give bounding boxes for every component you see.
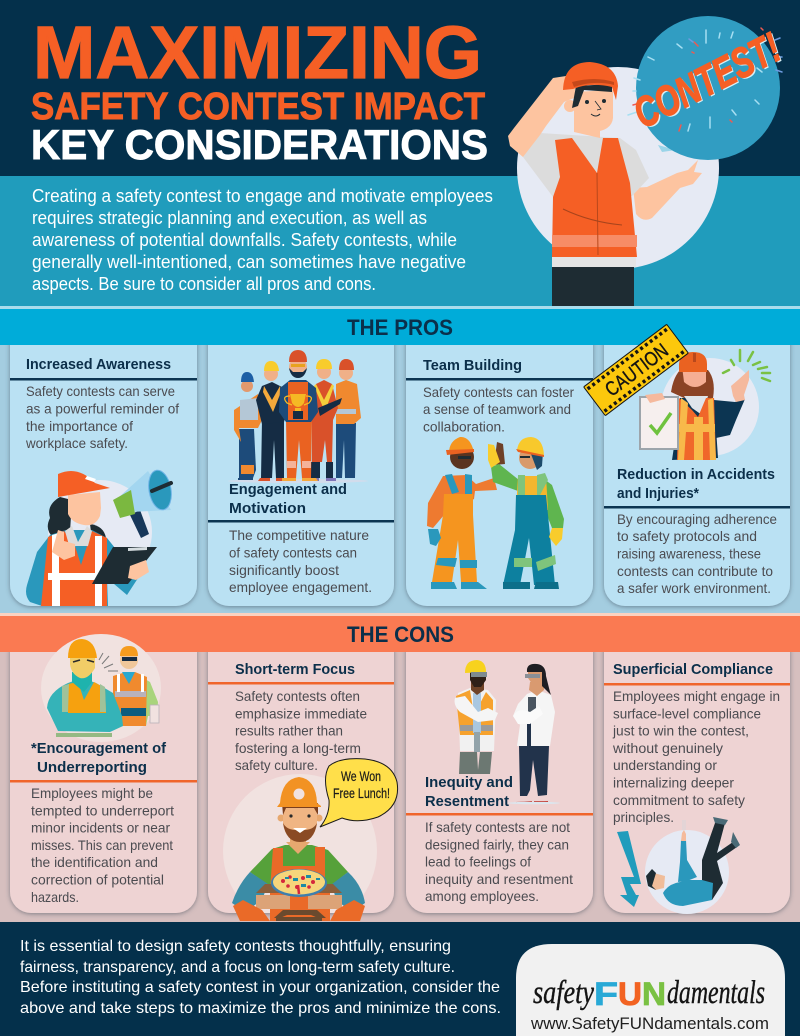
illustration: woman with checklist: [640, 350, 770, 460]
logo panel: www.SafetyFUNdamentals.com: [530, 1014, 769, 1033]
intro text: generally well-intentioned, can sometimes have negative: [32, 252, 466, 272]
panel: engagement and motivation: Engagement and: [229, 481, 347, 498]
panel text: inequity and resentment: lead to feelings of: [425, 854, 531, 870]
illustration: falling man and lightning bolt: [617, 817, 740, 914]
logo wordmark: F: [594, 976, 618, 1012]
worker 1: [234, 372, 262, 480]
pros band: [0, 309, 800, 345]
panel: increased awareness: [10, 320, 197, 606]
header background: [0, 0, 800, 176]
panel: team building: a sense of teamwork and: [423, 401, 571, 417]
panel: reduction in accidents: Reduction in Accidents: [617, 466, 775, 483]
title: MAXIMIZING: [33, 11, 482, 94]
panel text: superficial compliance: commitment to safety: [613, 792, 745, 808]
illustration: man and woman with crossed arms: [455, 660, 560, 804]
intro background band: [0, 176, 800, 306]
illustration: woman with megaphone: [26, 468, 174, 606]
title: KEY CONSIDERATIONS: [31, 121, 488, 168]
panel text: inequity and resentment: designed fairly, they can: [425, 836, 569, 852]
panel text: inequity and resentment: among employees.: [425, 888, 539, 904]
panel text: short-term focus: fostering a long-term: [235, 740, 361, 756]
footer background: [0, 922, 800, 1036]
icon: caution sign: [584, 324, 688, 416]
logo wordmark: [533, 975, 765, 1012]
panel text: inequity and resentment: inequity and resentment: [425, 871, 573, 887]
panel: engagement and motivation: The competitive nature: [229, 527, 369, 543]
cons band: [0, 616, 800, 652]
logo wordmark: safety: [533, 975, 594, 1011]
panel text: superficial compliance: [604, 661, 790, 825]
panel: engagement and motivation: [208, 320, 394, 606]
divider line: [0, 306, 800, 309]
panel: reduction in accidents: and Injuries*: [617, 485, 699, 502]
footer text: fairness, transparency, and a focus on long-term safety culture.: [20, 959, 455, 976]
panel text: superficial compliance: Employees might engage in: [613, 688, 780, 704]
logo panel: [516, 944, 785, 1036]
man in vest: [455, 660, 498, 774]
worker 5: [336, 359, 361, 478]
illustration: team with trophy: [228, 350, 368, 483]
footer text: Before instituting a safety contest in your organization, consider the: [20, 979, 500, 996]
panel text: inequity and resentment: [406, 774, 593, 904]
panel: engagement and motivation: Motivation: [229, 500, 306, 517]
cons section background: [0, 652, 800, 923]
callout: we won free lunch: We Won: [341, 768, 381, 784]
panel text: inequity and resentment: If safety contests are not: [425, 819, 570, 835]
panel text: superficial compliance: just to win the contest,: [612, 723, 749, 739]
panel text: encouragement of underreporting: correction of potential: [31, 872, 164, 888]
callout: we won free lunch: [320, 759, 398, 827]
illustration: contest speech bubble: [626, 16, 790, 160]
panel text: encouragement of underreporting: [10, 740, 197, 905]
illustration: two workers high five: [427, 437, 564, 589]
panel text: superficial compliance: surface-level compliance: [613, 705, 761, 721]
panel text: encouragement of underreporting: misses. This can prevent: [31, 837, 173, 853]
divider line: [0, 613, 800, 616]
panel: team building: collaboration.: [423, 418, 505, 434]
panel: reduction in accidents: a safer work environment.: [617, 580, 771, 596]
panel: increased awareness: the importance of: [26, 418, 133, 434]
panel: reduction in accidents: By encouraging adherence: [617, 511, 777, 527]
panel: increased awareness: Increased Awareness: [26, 356, 171, 373]
intro text: [32, 186, 493, 294]
panel text: superficial compliance: Superficial Compliance: [613, 661, 773, 678]
panel: reduction in accidents: [604, 320, 790, 606]
icon: caution sign: CAUTION: [601, 340, 673, 401]
panel: engagement and motivation: significantly boost: [229, 562, 339, 578]
title: [31, 11, 488, 168]
panel: increased awareness: as a powerful reminder of: [26, 400, 179, 416]
logo wordmark: damentals: [667, 975, 765, 1011]
footer text: [20, 938, 501, 1017]
intro text: Creating a safety contest to engage and motivate employees: [32, 186, 493, 206]
panel text: short-term focus: Safety contests often: [235, 688, 360, 704]
illustration: two workers arguing: [41, 634, 161, 742]
panel text: short-term focus: safety culture.: [235, 757, 318, 773]
intro text: aspects. Be sure to consider all pros and cons.: [32, 274, 376, 294]
pros band: THE PROS: [347, 315, 453, 340]
footer text: above and take steps to maximize the pros and minimize the cons.: [20, 1000, 501, 1017]
cons band: THE CONS: [347, 622, 454, 647]
panel text: encouragement of underreporting: minor incidents or near: [31, 820, 170, 836]
pros section background: [0, 345, 800, 615]
panel text: encouragement of underreporting: tempted to underreport: [31, 802, 174, 818]
intro text: awareness of potential downfalls. Safety contests, while: [32, 230, 457, 250]
callout: we won free lunch: Free Lunch!: [333, 785, 390, 801]
panel text: short-term focus: [208, 661, 394, 773]
panel text: inequity and resentment: Inequity and: [425, 774, 513, 791]
panel: increased awareness: Safety contests can serve: [26, 383, 175, 399]
panel text: short-term focus: results rather than: [235, 723, 343, 739]
cons card backgrounds: [10, 630, 790, 913]
panel text: short-term focus: Short-term Focus: [235, 661, 355, 678]
panel: reduction in accidents: to safety protocols and: [617, 528, 757, 544]
panel text: encouragement of underreporting: hazards.: [31, 889, 79, 905]
logo wordmark: N: [642, 976, 666, 1012]
footer text: It is essential to design safety contests thoughtfully, ensuring: [20, 938, 451, 955]
right worker: [488, 437, 564, 589]
panel text: encouragement of underreporting: *Encouragement of: [31, 740, 167, 757]
worker 2: [256, 361, 288, 481]
illustration: worker with pizza: [223, 774, 377, 928]
panel: reduction in accidents: contests can contribute to: [617, 563, 773, 579]
intro text: requires strategic planning and execution, as well as: [32, 208, 427, 228]
left worker: [427, 437, 505, 589]
worker 4: [307, 359, 342, 481]
worker 3 with trophy: [279, 350, 318, 481]
panel: increased awareness: workplace safety.: [25, 435, 128, 451]
panel: team building: Team Building: [423, 357, 522, 374]
panel: reduction in accidents: raising awareness, these: [617, 546, 761, 562]
panel: team building: [406, 320, 593, 606]
panel text: encouragement of underreporting: Underreporting: [37, 759, 147, 776]
panel text: encouragement of underreporting: Employees might be: [31, 785, 153, 801]
panel text: superficial compliance: without genuinely: [612, 740, 723, 756]
panel: engagement and motivation: of safety contests can: [229, 544, 357, 560]
panel: team building: Safety contests can foster: [423, 384, 574, 400]
panel text: short-term focus: emphasize immediate: [235, 705, 367, 721]
illustration: worker pointing at contest bubble: [508, 62, 719, 306]
panel text: superficial compliance: understanding or: [613, 757, 717, 773]
logo wordmark: U: [618, 976, 642, 1012]
title: SAFETY CONTEST IMPACT: [31, 86, 485, 128]
panel: engagement and motivation: employee engagement.: [229, 579, 372, 595]
pros cards row: [10, 320, 790, 606]
panel text: superficial compliance: internalizing deeper: [613, 774, 734, 790]
woman in lab coat: [508, 664, 560, 804]
panel text: inequity and resentment: Resentment: [425, 793, 509, 810]
panel text: superficial compliance: principles.: [613, 809, 674, 825]
panel text: encouragement of underreporting: the identification and: [31, 854, 158, 870]
